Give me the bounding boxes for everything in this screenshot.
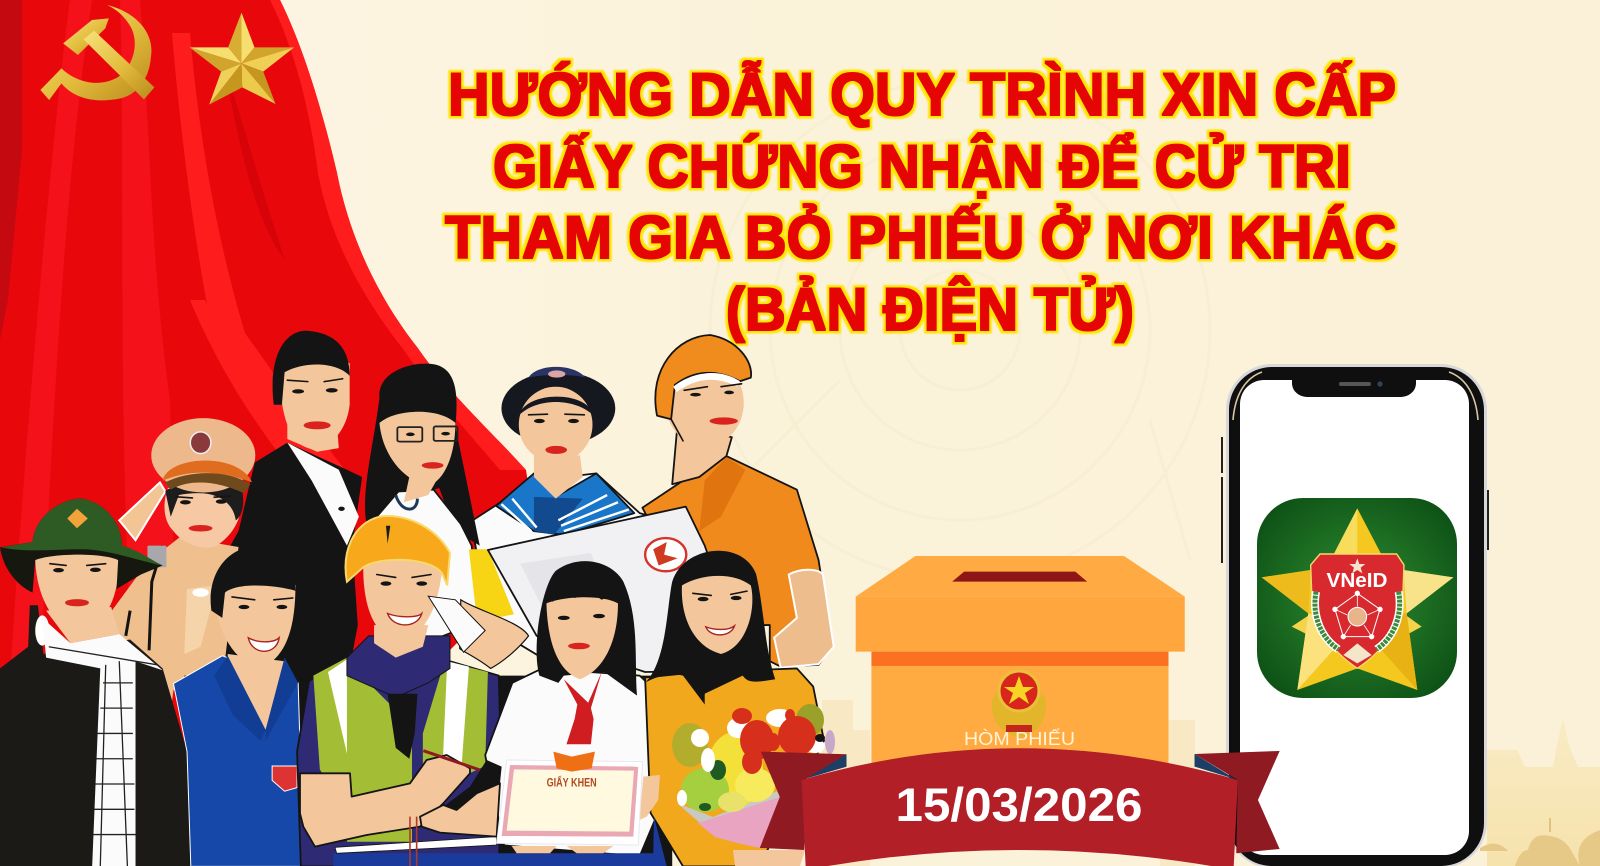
ballot box [856, 556, 1185, 776]
certificate [497, 752, 643, 845]
date ribbon [760, 748, 1280, 866]
title [445, 61, 1396, 343]
phone [443, 760, 502, 810]
box slot [952, 572, 1087, 582]
girl's forearm and hands [512, 775, 660, 853]
box body [871, 666, 1169, 776]
worker's arm, hands and certificate [300, 751, 667, 866]
title: THAM GIA BỎ PHIẾU Ở NƠI KHÁC [445, 204, 1396, 271]
star badge [1262, 508, 1453, 690]
box lid front [856, 597, 1185, 652]
skyline backdrop [822, 700, 1600, 866]
title: HƯỚNG DẪN QUY TRÌNH XIN CẤP [448, 61, 1396, 128]
ribbon tails [760, 748, 1280, 866]
box lid [856, 556, 1185, 597]
white paper strip [335, 837, 497, 853]
icon: hammer and sickle [40, 5, 154, 100]
red flag backdrop [0, 0, 540, 800]
title: (BẢN ĐIỆN TỬ) [726, 276, 1134, 343]
arm [300, 755, 470, 847]
person: woman in yellow [645, 551, 824, 866]
dark filler behind front row [184, 676, 672, 866]
person: man in suit [179, 331, 362, 683]
second hand [420, 783, 500, 837]
person: woman in green hat and scarf [0, 499, 195, 866]
person: man in blue shirt [173, 547, 304, 866]
box band [871, 652, 1169, 666]
pen [423, 751, 480, 770]
phone [1221, 364, 1489, 866]
date: 15/03/2026 [896, 778, 1142, 831]
icon: gold star [190, 13, 294, 105]
person: student girl [485, 561, 678, 856]
person: orange hard-hat worker [642, 335, 834, 668]
person: police officer saluting [110, 418, 255, 770]
blue uniforms along the bottom [333, 817, 667, 866]
banner held up with logo [488, 507, 748, 672]
title: GIẤY CHỨNG NHẬN ĐỂ CỬ TRI [493, 133, 1351, 200]
person: worker in reflective vest [297, 516, 529, 866]
person: sailor [472, 367, 678, 661]
group of citizens [0, 331, 834, 866]
certificate: GIẤY KHEN [547, 775, 597, 790]
person: woman with glasses [365, 364, 514, 661]
lanyard [410, 817, 417, 866]
figures [0, 331, 834, 866]
icon: VNeID app: VNeID [1326, 570, 1388, 592]
icon: national emblem [992, 671, 1046, 737]
icon: VNeID app [1257, 498, 1457, 698]
flower bouquet [672, 704, 835, 866]
ballot box label: HÒM PHIẾU [964, 728, 1075, 749]
